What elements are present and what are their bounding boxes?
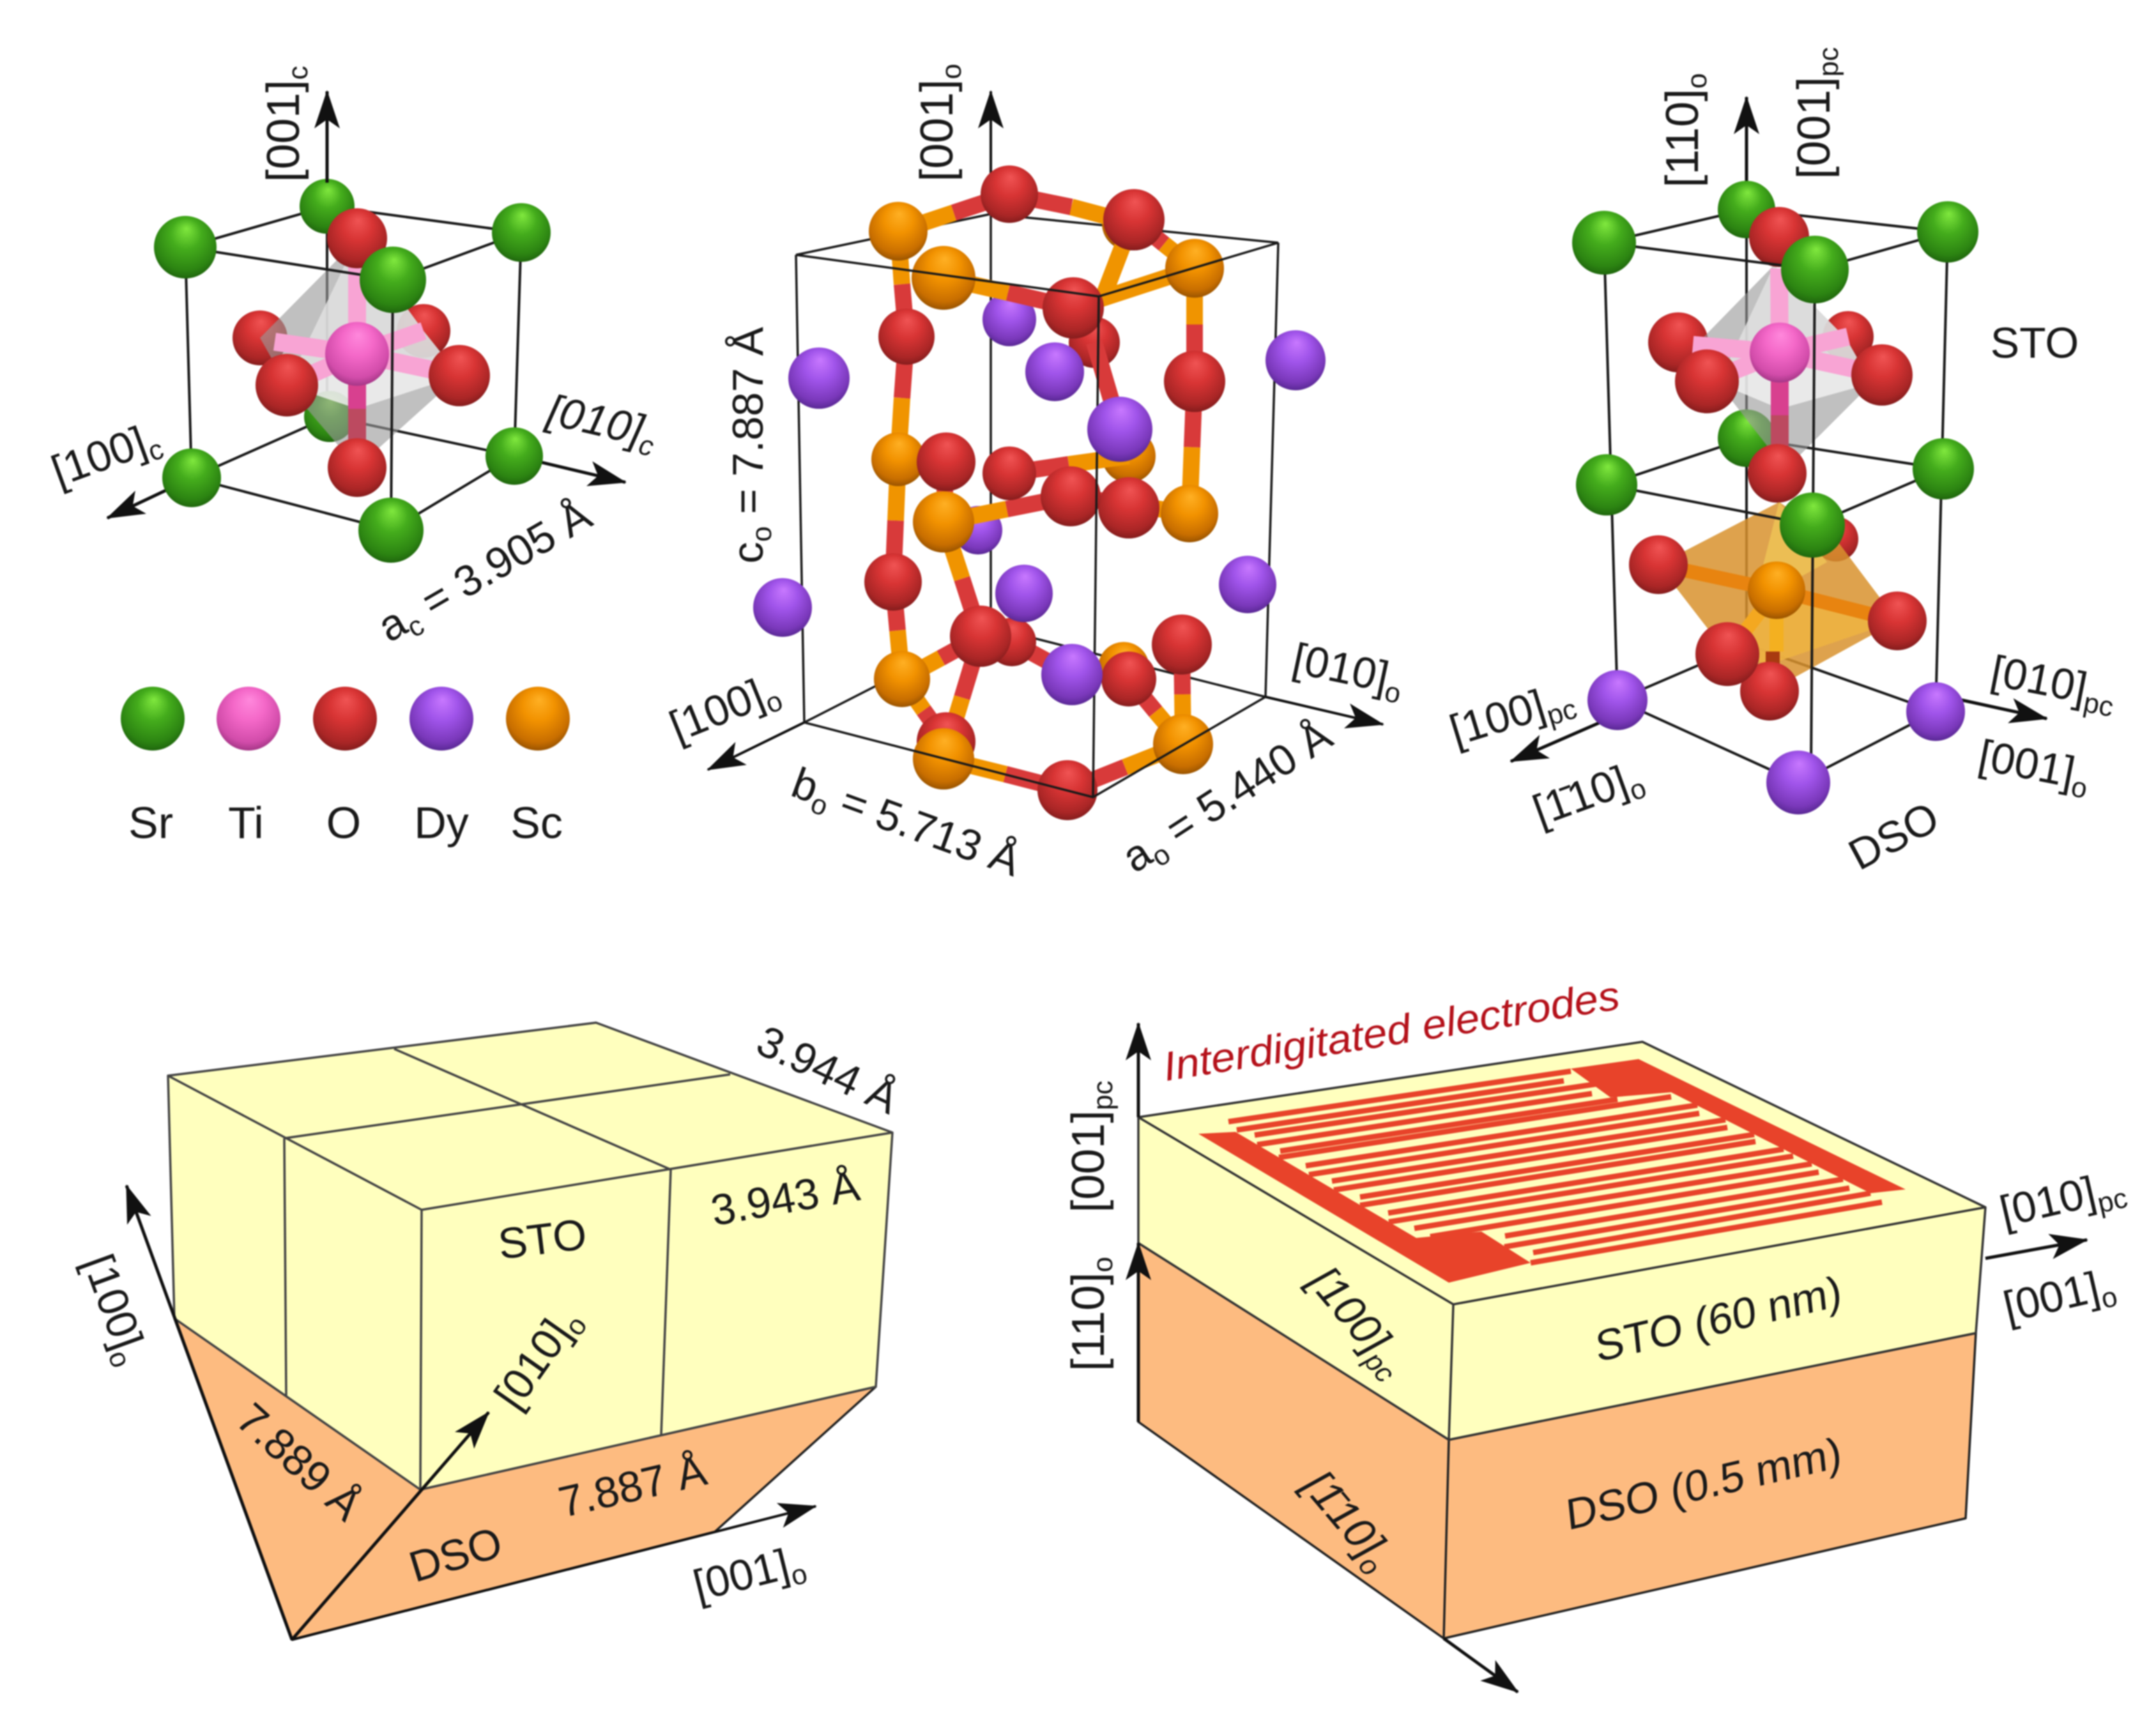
back Sr atoms <box>1718 181 1775 467</box>
scandium atoms <box>869 202 1224 774</box>
label [001]o: [001] <box>1975 731 2079 797</box>
label [100]o: o <box>102 1347 137 1372</box>
legend Ti: Ti <box>228 798 264 848</box>
Ti atom <box>325 322 389 386</box>
label [100]pc: [100] <box>1444 680 1550 755</box>
axis arrow [110]o <box>1137 1243 1140 1422</box>
label [100]pc: pc <box>1543 693 1580 732</box>
Sc-O bonds orange half <box>896 207 1195 774</box>
label 3.944: 3.944 Å <box>749 1016 906 1124</box>
axis arrow [001]c <box>326 91 328 183</box>
heading: interdigitated electrodes: Interdigitated electrodes <box>1160 972 1623 1090</box>
label [010]o: o <box>1382 676 1403 710</box>
legend Dy <box>409 687 473 848</box>
panel: orthorhombic DyScO3 unit cell <box>663 64 1409 890</box>
label lattice constant co: = 7.887 Å <box>724 326 772 526</box>
label DSO substrate: DSO (0.5 mm) <box>1564 1428 1844 1539</box>
label DSO: DSO <box>1841 793 1946 880</box>
STO block <box>168 1023 892 1490</box>
label [110]o: [110] <box>1063 1272 1114 1371</box>
legend Sc: Sc <box>510 798 563 848</box>
label 7.889: 7.889 Å <box>227 1394 371 1530</box>
label [001]o: o <box>788 1558 811 1592</box>
label [010]o: [010] <box>485 1311 580 1417</box>
label 7.887: 7.887 Å <box>554 1446 712 1527</box>
label [100]c: c <box>144 433 167 468</box>
label [010]c: c <box>636 429 657 462</box>
axis arrow [001]o <box>292 1506 816 1640</box>
axis arrow [010]o <box>292 1412 489 1640</box>
label lattice constant ao: a <box>1113 828 1160 882</box>
axis arrow [100]o <box>126 1186 292 1640</box>
front oxygens <box>256 208 490 497</box>
label [001]o: o <box>936 64 967 79</box>
oxygen atoms <box>864 165 1225 771</box>
legend Dy: Dy <box>414 798 469 848</box>
label lattice constant bo: b <box>786 758 825 813</box>
front oxygen atoms <box>917 277 1104 820</box>
label [-110]o: o <box>1625 772 1651 807</box>
label [-110]o: [1̄10] <box>1294 1461 1393 1567</box>
label [-110]o: [1̄10] <box>1527 757 1634 836</box>
panel: device with interdigitated electrodes <box>1063 972 2130 1692</box>
legend: atom types <box>121 687 570 848</box>
axis arrow [010]pc <box>1985 1240 2087 1258</box>
STO film block <box>1138 1042 1985 1440</box>
label [010]pc: [010] <box>1995 1167 2100 1236</box>
Ti-O bonds <box>275 256 459 468</box>
label lattice constant bo: o <box>807 788 832 822</box>
STO oxygens <box>1675 207 1913 503</box>
cell back edges <box>1604 210 1948 712</box>
label [010]pc: [010] <box>1987 646 2091 712</box>
back oxygens <box>1648 311 1874 561</box>
gray TiO6 octahedron <box>260 240 459 468</box>
axis arrow [100]c <box>107 484 179 518</box>
label [001]c: c <box>282 66 314 80</box>
label [001]c: [001] <box>258 80 309 182</box>
axis arrow [010]pc <box>1956 699 2047 719</box>
legend O: O <box>326 798 361 848</box>
label STO: STO <box>496 1210 590 1269</box>
lower back Sr atom <box>304 391 355 442</box>
label [100]pc: pc <box>1357 1345 1401 1389</box>
legend Sr <box>121 687 185 848</box>
back oxygens <box>233 304 450 365</box>
Sc atom <box>1748 561 1805 619</box>
label lattice constant co: c <box>724 542 772 563</box>
orange ScO6 octahedron <box>1658 502 1897 691</box>
label [100]pc: [100] <box>1300 1257 1399 1362</box>
Ti-O bonds <box>1693 268 1882 473</box>
label DSO: DSO <box>404 1518 508 1592</box>
cell front edges <box>1604 232 1948 782</box>
Sc-O bonds <box>1658 565 1897 691</box>
label [100]o: [100] <box>73 1248 152 1355</box>
label STO: STO <box>1991 319 2079 367</box>
label [001]pc: [001] <box>1789 77 1840 179</box>
label [-110]o: o <box>1352 1550 1386 1582</box>
legend O <box>313 687 377 848</box>
panel: STO on DSO pseudocubic cell <box>1444 47 2120 880</box>
label lattice constant ac: a <box>370 597 415 652</box>
cell back edges <box>185 206 521 478</box>
label [100]o: [100] <box>663 670 770 751</box>
corner Sr atoms <box>154 203 551 563</box>
label [001]pc: pc <box>1813 47 1844 77</box>
label [001]o: o <box>2068 771 2090 805</box>
label [010]pc: pc <box>2081 687 2116 723</box>
axis arrow [100]o <box>708 722 804 770</box>
Ti atom <box>1750 323 1810 383</box>
panel: cubic SrTiO3 unit cell <box>45 66 662 656</box>
back atoms <box>1069 197 1156 693</box>
legend Sr: Sr <box>128 798 173 848</box>
label [010]c: [010] <box>543 385 648 455</box>
DSO oxygens <box>1629 535 1927 721</box>
back Dy atoms <box>753 293 1326 637</box>
Sr atoms <box>1572 201 1978 558</box>
label [110]o: [110] <box>1657 89 1708 188</box>
front Dy atoms <box>995 342 1152 705</box>
label lattice constant ac: c <box>402 609 429 644</box>
axis arrow vertical <box>1745 97 1748 185</box>
label [110]o: o <box>1681 73 1713 89</box>
label [010]o: o <box>559 1311 593 1341</box>
label lattice constant ac: = 3.905 Å <box>402 491 600 632</box>
label [001]pc: [001] <box>1063 1110 1114 1212</box>
cell back edges <box>796 214 1278 722</box>
label [001]o: o <box>2098 1281 2120 1315</box>
label 3.943: 3.943 Å <box>707 1161 864 1235</box>
label [010]o: [010] <box>1288 634 1393 701</box>
label [001]o: [001] <box>1999 1263 2104 1332</box>
label [100]o: o <box>761 685 787 720</box>
label [010]pc: pc <box>2095 1182 2130 1219</box>
DSO substrate block <box>1138 1243 1976 1638</box>
axis arrow [010]o <box>1265 697 1383 724</box>
cell front edges <box>796 243 1278 797</box>
label lattice constant co: o <box>746 526 777 542</box>
cell front edges <box>185 233 521 530</box>
Dy atoms <box>1587 670 1965 814</box>
legend Sc <box>506 687 570 848</box>
panel: lattice matching block <box>69 1016 906 1640</box>
back Sr atom <box>300 179 355 234</box>
axis arrow [001]o <box>990 91 992 214</box>
label STO film: STO (60 nm) <box>1593 1267 1844 1371</box>
electrode buses and pads <box>1198 1059 1906 1283</box>
label [001]o: [001] <box>689 1540 794 1610</box>
label [100]c: [100] <box>45 417 153 496</box>
legend Ti <box>217 687 280 848</box>
label [001]pc: pc <box>1087 1081 1119 1110</box>
front scandium atoms <box>912 246 975 790</box>
electrode fingers <box>1228 1071 1882 1263</box>
axis arrow [100]pc <box>1511 722 1602 761</box>
Sc-O bonds red half <box>893 194 1195 790</box>
label lattice constant ao: o <box>1146 838 1176 873</box>
label lattice constant bo: = 5.713 Å <box>823 772 1027 886</box>
axis arrow [001]pc <box>1137 1023 1140 1117</box>
gray TiO6 octahedron <box>1693 265 1872 469</box>
label lattice constant ao: = 5.440 Å <box>1147 711 1341 860</box>
label [110]o: o <box>1087 1256 1119 1272</box>
DSO substrate wedge <box>174 1318 876 1640</box>
axis arrow down <box>1444 1638 1518 1692</box>
label [001]o: [001] <box>912 79 963 181</box>
axis arrow [010]c <box>537 461 625 482</box>
